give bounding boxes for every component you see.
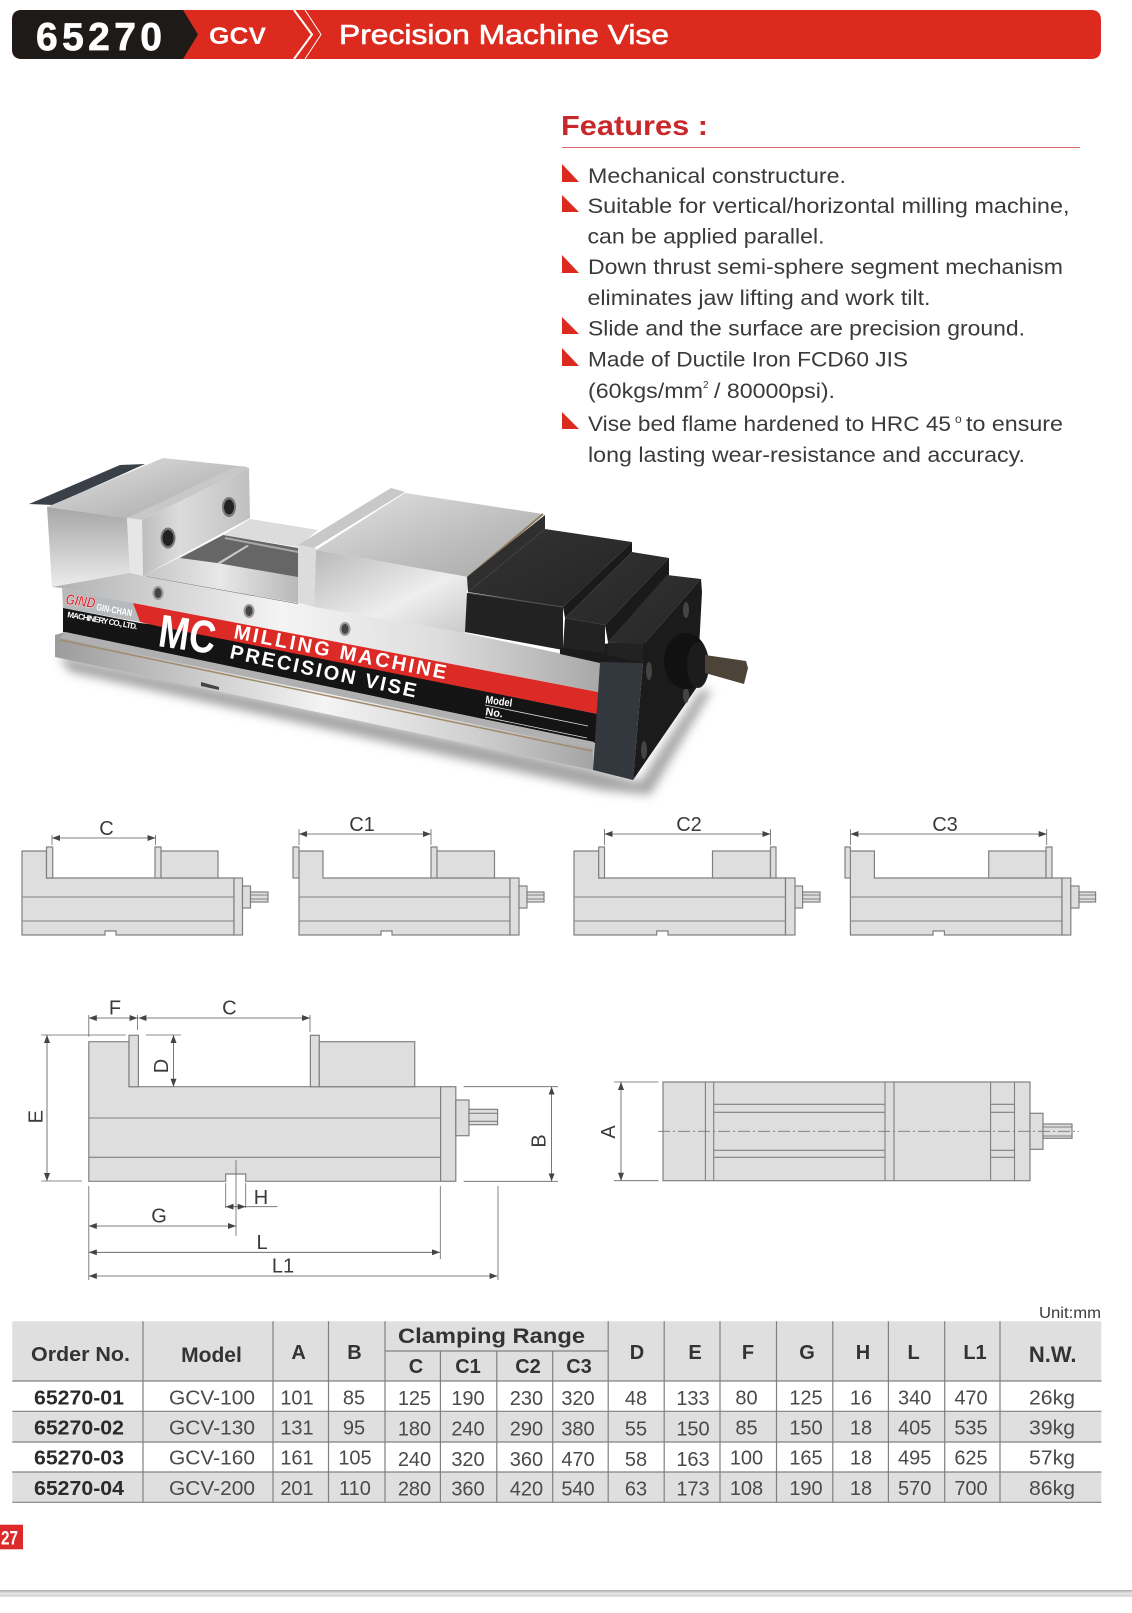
dimension label A: A	[598, 1125, 620, 1139]
dimension label E: E	[26, 1110, 48, 1123]
table row 65270-02: GCV-130	[169, 1418, 255, 1440]
table header row: N.W.	[1029, 1342, 1077, 1367]
unit note: Unit:mm	[1039, 1305, 1101, 1322]
table row 65270-02: 405	[898, 1418, 931, 1440]
dimension label D: D	[151, 1059, 173, 1073]
table row 65270-01: 26kg	[1029, 1387, 1075, 1409]
table row 65270-04: 173	[676, 1479, 710, 1501]
table header row: F	[742, 1342, 754, 1364]
table row 65270-01: 133	[676, 1388, 710, 1410]
table row 65270-02: 55	[625, 1418, 647, 1440]
table row 65270-02	[34, 1418, 1075, 1440]
table row 65270-03: GCV-160	[169, 1447, 255, 1469]
feature: flame hardened: Vise bed flame hardened to HRC 45	[588, 413, 951, 436]
dimension label L1: L1	[272, 1256, 294, 1278]
table row 65270-03: 495	[898, 1447, 931, 1469]
dimension label C1: C1	[349, 814, 375, 836]
diagram: clamping range C1	[293, 814, 544, 935]
table row 65270-02: 290	[510, 1418, 543, 1440]
table row 65270-01: 230	[510, 1388, 543, 1410]
order code: 65270	[36, 16, 162, 59]
photo label: milling machine: MILLING MACHINE	[232, 621, 448, 684]
table row 65270-04: 540	[561, 1479, 595, 1501]
table row 65270-01: 85	[343, 1387, 365, 1409]
table header row: L1	[963, 1342, 987, 1364]
table row 65270-04: 110	[339, 1478, 371, 1500]
feature: down thrust	[562, 255, 1063, 310]
table row 65270-01: 340	[898, 1387, 931, 1409]
table header row: C	[409, 1356, 423, 1378]
table row 65270-02: 18	[850, 1418, 872, 1440]
table row 65270-04: 570	[898, 1478, 931, 1500]
table row 65270-02: 150	[789, 1418, 823, 1440]
photo label: MC: MC	[156, 604, 219, 664]
chevron divider	[294, 10, 321, 59]
feature: flame hardened: to ensure	[966, 413, 1063, 436]
table row 65270-03: 320	[451, 1449, 485, 1471]
table row 65270-02: 535	[954, 1418, 988, 1440]
table row 65270-04: 65270-04	[34, 1478, 125, 1500]
table row 65270-02: 131	[280, 1418, 314, 1440]
table row 65270-04	[34, 1478, 1075, 1501]
diagram: side view with dimensions	[26, 998, 558, 1280]
table row 65270-04: 108	[730, 1478, 763, 1500]
table header row: C1	[455, 1356, 481, 1378]
table header row: Model	[181, 1344, 242, 1367]
table row 65270-04: 18	[850, 1478, 872, 1500]
feature: milling suitability	[562, 195, 1070, 248]
table row 65270-04: 700	[954, 1478, 988, 1500]
table header row: G	[799, 1342, 815, 1364]
table row 65270-04: 420	[510, 1479, 543, 1501]
table row 65270-02: 65270-02	[34, 1418, 124, 1440]
table header row: Order No.	[31, 1344, 130, 1366]
specification table	[12, 1321, 1101, 1502]
table header row: C2	[515, 1356, 541, 1378]
table row 65270-02: 85	[735, 1418, 758, 1440]
table row 65270-03: 57kg	[1029, 1447, 1075, 1469]
table header row: H	[856, 1342, 870, 1364]
dimension label B: B	[528, 1134, 550, 1148]
photo label: model no	[485, 694, 513, 720]
table row 65270-01: 80	[735, 1387, 758, 1409]
table row 65270-04: 360	[451, 1479, 485, 1501]
table row 65270-04: 86kg	[1029, 1478, 1075, 1500]
table row 65270-03: 625	[954, 1447, 988, 1469]
table row 65270-03: 58	[625, 1449, 647, 1471]
table header row	[31, 1325, 1077, 1378]
table row 65270-01: GCV-100	[169, 1387, 255, 1409]
diagram: clamping range C	[22, 818, 268, 935]
feature: down thrust: eliminates jaw lifting and work tilt.	[588, 287, 930, 310]
table row 65270-04: 63	[625, 1479, 647, 1501]
table row 65270-03: 100	[730, 1447, 763, 1469]
diagram: clamping range C2	[574, 814, 820, 935]
table row 65270-03: 163	[676, 1449, 710, 1471]
panel: features	[561, 110, 1080, 467]
photo label: model no: No.	[485, 706, 504, 720]
photo label: precision vise: PRECISION VISE	[228, 641, 418, 702]
feature: ductile iron: / 80000psi).	[714, 380, 835, 403]
table row 65270-04: 201	[280, 1478, 314, 1500]
table header row: L	[907, 1342, 920, 1364]
feature: ductile iron: Made of Ductile Iron FCD60 JIS	[588, 348, 908, 372]
feature: ductile iron: (60kgs/mm	[588, 380, 703, 403]
table header row: E	[688, 1342, 702, 1364]
feature: flame hardened: long lasting wear-resistance and accuracy.	[588, 444, 1025, 467]
table row 65270-04: GCV-200	[169, 1478, 255, 1500]
table row 65270-01	[34, 1387, 1075, 1410]
table row 65270-03: 18	[850, 1447, 872, 1469]
table row 65270-03	[34, 1447, 1075, 1471]
page number badge: 27	[1, 1528, 18, 1550]
table row 65270-01: 101	[280, 1387, 314, 1409]
diagram: top view with width dimension	[598, 1082, 1079, 1181]
table row 65270-01: 16	[850, 1387, 872, 1409]
feature: mechanical construction: Mechanical constructure.	[588, 165, 846, 188]
table row 65270-01: 125	[789, 1387, 823, 1409]
table row 65270-01: 125	[398, 1388, 431, 1410]
table row 65270-02: 240	[451, 1418, 485, 1440]
table row 65270-01: 65270-01	[34, 1387, 124, 1409]
table header row: D	[630, 1342, 644, 1364]
feature: precision ground: Slide and the surface are precision ground.	[588, 318, 1025, 340]
table row 65270-03: 240	[398, 1449, 431, 1471]
table header row: B	[347, 1342, 362, 1364]
table row 65270-03: 360	[510, 1449, 543, 1471]
dimension label G: G	[151, 1206, 167, 1228]
table row 65270-03: 165	[789, 1447, 823, 1469]
feature: ductile iron	[562, 348, 908, 403]
feature: flame hardened: o	[955, 412, 962, 426]
product title: Precision Machine Vise	[339, 19, 669, 50]
table row 65270-01: 190	[451, 1388, 485, 1410]
dimension label C2: C2	[676, 814, 702, 836]
photo label: model no: Model	[485, 694, 513, 710]
header banner	[12, 10, 1101, 59]
table row 65270-02: 180	[398, 1418, 431, 1440]
table row 65270-03: 65270-03	[34, 1447, 124, 1469]
feature: milling suitability: Suitable for vertical/horizontal milling machine,	[588, 195, 1070, 218]
table row 65270-04: 280	[398, 1479, 431, 1501]
feature: milling suitability: can be applied parallel.	[588, 226, 824, 248]
table row 65270-01: 320	[561, 1388, 595, 1410]
table row 65270-03: 470	[561, 1449, 595, 1471]
table row 65270-02: 380	[561, 1418, 595, 1440]
table row 65270-03: 105	[338, 1447, 372, 1469]
dimension label C: C	[222, 998, 237, 1020]
dimension label C3: C3	[932, 814, 958, 836]
photo label: company: MACHINERY CO., LTD.	[67, 610, 138, 631]
series code: GCV	[209, 23, 266, 50]
photo label: GIN-CHAN: GIN-CHAN	[95, 602, 133, 619]
product photo: vise	[29, 458, 748, 795]
table row 65270-02: 39kg	[1029, 1418, 1075, 1440]
photo label: brand: GIND	[64, 591, 97, 612]
table header row: Clamping Range	[398, 1325, 585, 1348]
table row 65270-02: 95	[343, 1418, 365, 1440]
table row 65270-01: 470	[954, 1387, 988, 1409]
diagram: clamping range C3	[845, 814, 1096, 935]
dimension label F: F	[109, 998, 121, 1020]
feature: flame hardened	[562, 412, 1063, 467]
feature: down thrust: Down thrust semi-sphere segment mechanism	[588, 256, 1063, 279]
feature: ductile iron: 2	[703, 380, 709, 391]
table header row: C3	[566, 1356, 592, 1378]
dimension label L: L	[256, 1232, 268, 1254]
features heading: Features :	[561, 110, 708, 141]
dimension label H: H	[254, 1187, 268, 1209]
dimension label C: C	[99, 818, 114, 840]
table header row: A	[291, 1342, 306, 1364]
table row 65270-03: 161	[280, 1447, 314, 1469]
table row 65270-02: 150	[676, 1418, 710, 1440]
table row 65270-01: 48	[625, 1388, 647, 1410]
table row 65270-04: 190	[789, 1478, 823, 1500]
